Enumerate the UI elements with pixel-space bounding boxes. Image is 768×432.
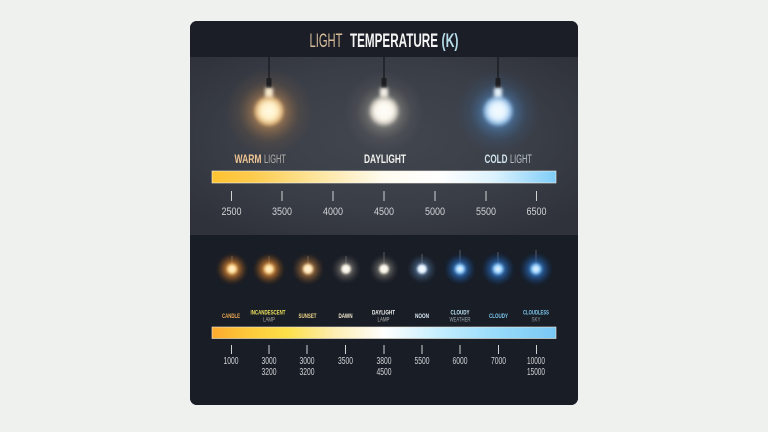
scale: upper ticks and values: 5500 — [476, 206, 496, 218]
bulb: cold — [464, 57, 533, 146]
scale: upper ticks and values: 4000 — [323, 206, 343, 218]
source labels: CLOUDY — [450, 310, 470, 316]
source labels: LAMP — [263, 316, 275, 324]
bulb: daylight — [354, 57, 413, 140]
title: TEMPERATURE — [350, 31, 438, 52]
bulb: warm — [232, 57, 305, 148]
title — [310, 33, 458, 51]
source labels: NOON — [415, 313, 429, 320]
scale: lower ticks and values: 5500 — [414, 356, 430, 367]
source labels — [222, 310, 549, 322]
source labels: SKY — [532, 316, 541, 324]
scale: lower ticks and values: 3500 — [338, 356, 353, 367]
scale: lower ticks and values: 15000 — [527, 367, 545, 378]
source labels: DAWN — [338, 313, 353, 320]
title: LIGHT — [310, 31, 343, 52]
infographic canvas — [190, 21, 578, 405]
gradient bar: upper scale — [212, 171, 556, 183]
scale: lower ticks and values: 3200 — [300, 367, 315, 378]
scale: lower ticks and values: 3000 — [300, 356, 315, 367]
panel: light types — [190, 57, 578, 235]
scale: upper ticks and values: 5000 — [425, 206, 445, 218]
scale: lower ticks and values — [224, 345, 545, 378]
scale: upper ticks and values — [222, 191, 546, 215]
source labels: LAMP — [378, 316, 390, 324]
source labels: WEATHER — [450, 316, 471, 324]
scale: lower ticks and values: 3800 — [376, 356, 392, 367]
scale: upper ticks and values: 2500 — [222, 206, 242, 218]
title: (K) — [442, 31, 458, 52]
source labels: SUNSET — [298, 313, 317, 320]
panel: light sources — [190, 235, 578, 405]
label: daylight: DAYLIGHT — [364, 152, 406, 166]
scale: lower ticks and values: 4500 — [376, 367, 392, 378]
source labels: CLOUDLESS — [523, 310, 549, 316]
scale: upper ticks and values: 4500 — [374, 206, 394, 218]
scale: upper ticks and values: 3500 — [272, 206, 292, 218]
label: cold light: LIGHT — [510, 152, 532, 166]
scale: lower ticks and values: 6000 — [452, 356, 468, 367]
small bulbs row — [216, 250, 553, 286]
label: cold light — [484, 154, 532, 163]
gradient bar: lower scale — [212, 327, 556, 338]
card — [190, 21, 578, 405]
scale: lower ticks and values: 3200 — [262, 367, 277, 378]
scale: upper ticks and values: 6500 — [526, 206, 546, 218]
scale: lower ticks and values: 7000 — [491, 356, 506, 367]
scale: lower ticks and values: 1000 — [224, 356, 239, 367]
scale: lower ticks and values: 3000 — [262, 356, 277, 367]
scale: lower ticks and values: 10000 — [527, 356, 545, 367]
source labels: CANDLE — [222, 313, 240, 320]
label: warm light: WARM — [234, 152, 262, 166]
source labels: CLOUDY — [489, 313, 508, 320]
label: warm light — [234, 154, 286, 163]
source labels: DAYLIGHT — [372, 310, 395, 316]
header band — [190, 21, 578, 51]
label: warm light: LIGHT — [264, 152, 286, 166]
source labels: INCANDESCENT — [250, 310, 286, 316]
label: cold light: COLD — [484, 152, 508, 166]
